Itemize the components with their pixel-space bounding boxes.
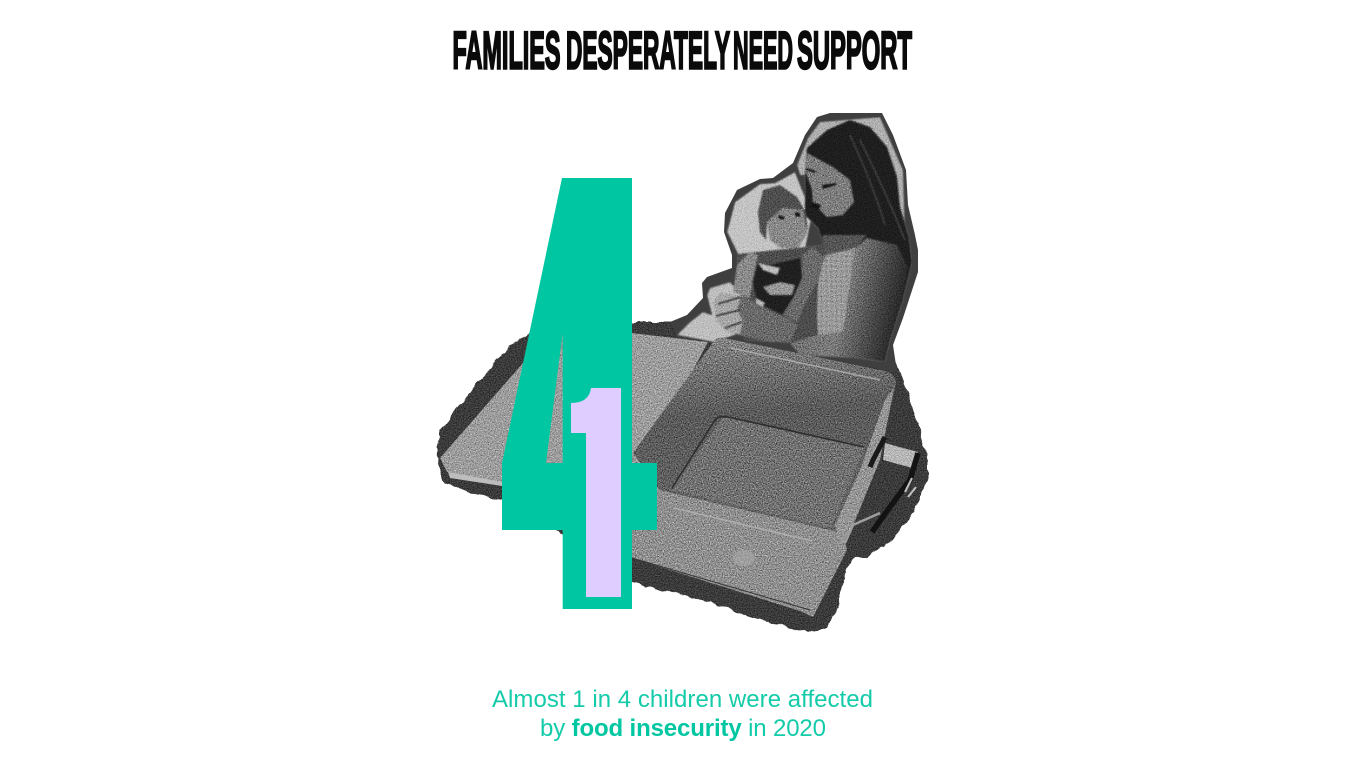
side bracket — [845, 513, 880, 543]
child right shoulder and arm — [783, 247, 825, 322]
lunchbox handle and clasp — [845, 437, 918, 543]
handle band — [883, 443, 918, 468]
rim highlight — [674, 348, 880, 541]
numeral 1 — [571, 388, 621, 597]
pale photo background around the child — [727, 172, 812, 255]
child left arm — [733, 252, 758, 298]
clasp — [870, 437, 885, 467]
embossed logo mark — [733, 550, 755, 566]
floor crease — [672, 416, 864, 488]
mother face — [805, 153, 854, 217]
title: FAMILIES — [452, 21, 560, 80]
child flowered dress — [753, 258, 802, 315]
photo collage: mother, child and empty lunchbox — [437, 113, 928, 633]
pale photo background around the mother — [797, 117, 905, 230]
front panel of the lunchbox — [625, 448, 847, 617]
torn paper backing behind lunchbox — [437, 322, 928, 633]
mother hand — [713, 293, 743, 335]
patterned dress — [817, 248, 855, 335]
lid edge strip — [448, 472, 502, 486]
mother arm and shoulder — [790, 238, 908, 362]
caption line 2: by food insecurity in 2020 — [540, 715, 826, 742]
child eyes — [778, 212, 800, 220]
hair strands — [850, 135, 905, 240]
title: NEED — [733, 21, 793, 80]
pale cloth on the lap — [677, 282, 742, 342]
caption — [492, 686, 873, 742]
body base tone — [735, 245, 825, 345]
title: DESPERATELY — [566, 21, 730, 80]
large numeral 4 — [502, 178, 657, 609]
lunchbox inner walls and rim — [633, 338, 896, 533]
finger lines — [716, 297, 742, 328]
open lunchbox lid — [440, 333, 708, 483]
caption line 1: Almost 1 in 4 children were affected — [492, 686, 873, 713]
mother eyelids and mouth — [806, 168, 836, 209]
lunchbox floor — [672, 417, 865, 528]
front bottom seam — [632, 558, 810, 610]
child forearm — [737, 295, 798, 342]
child hair — [758, 185, 808, 240]
dark cutout border of mother and child — [670, 113, 918, 372]
dress flower — [763, 282, 795, 295]
handle sheen — [905, 478, 916, 497]
dress pattern — [817, 248, 855, 335]
infographic canvas: SUPPORT — [797, 21, 912, 80]
mother hair — [805, 120, 912, 347]
lunchbox right side band — [835, 388, 894, 552]
handle — [872, 453, 918, 532]
mother neck and chest — [822, 235, 867, 254]
mother and child cutout — [677, 117, 912, 362]
dress collar flowers — [756, 263, 780, 308]
child face — [767, 208, 807, 248]
